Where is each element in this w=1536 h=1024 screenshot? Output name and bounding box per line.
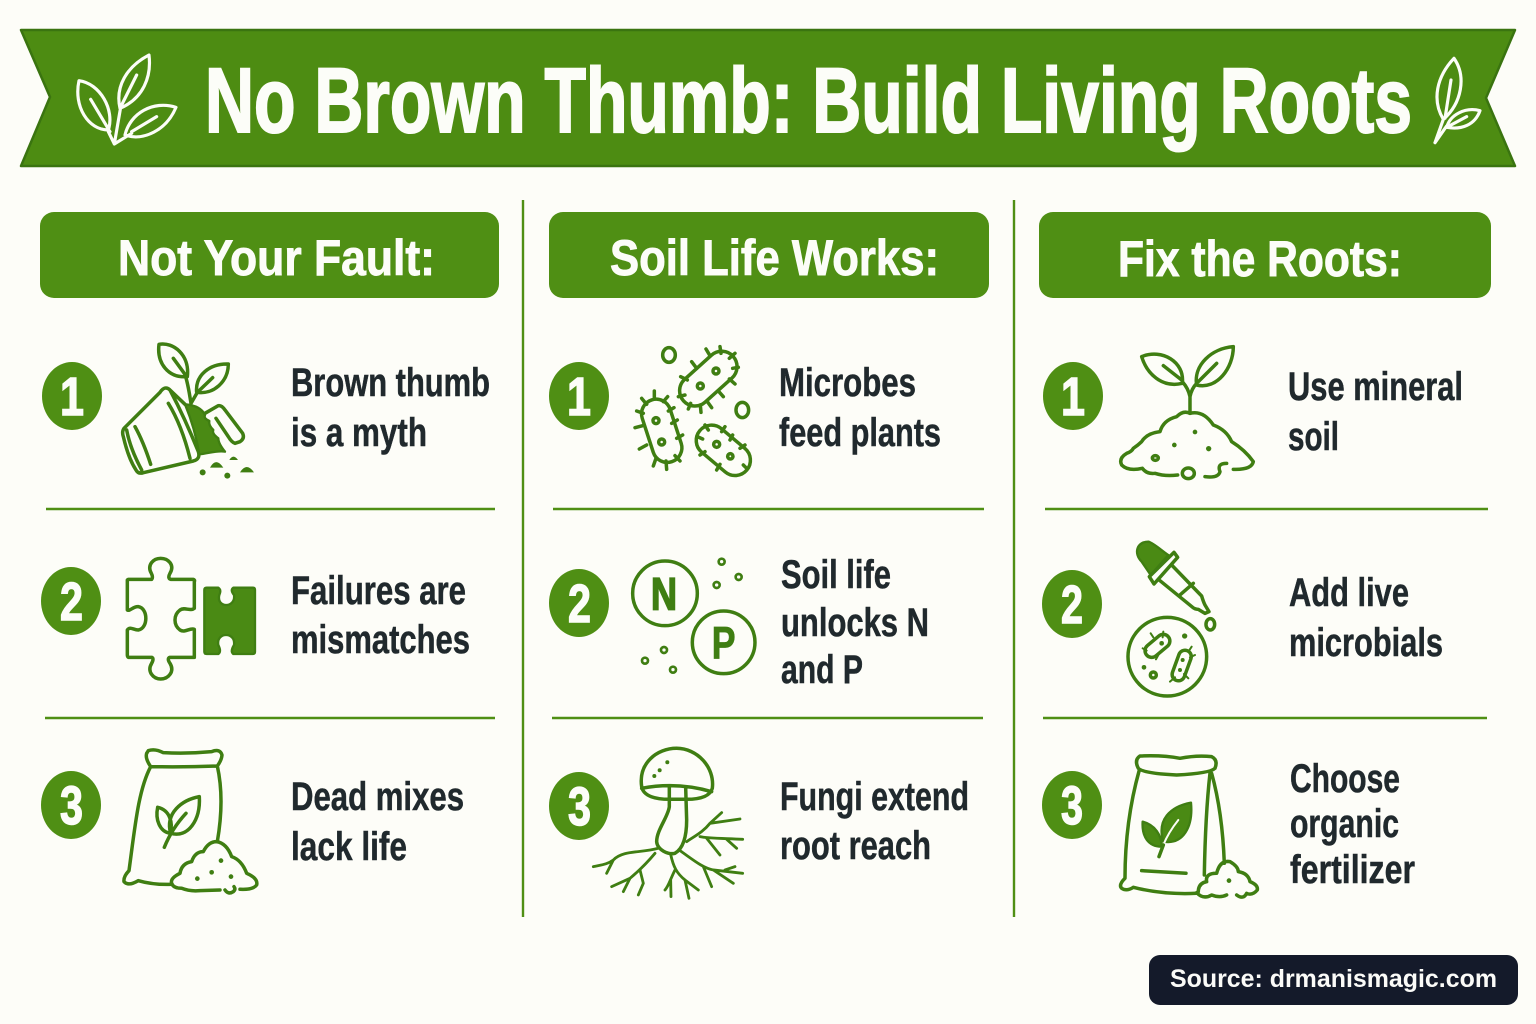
heading: fix the roots xyxy=(1039,212,1491,298)
number badge 1: 1 xyxy=(567,367,591,427)
number badge 1 xyxy=(42,362,102,430)
item: soil life unlocks n and p xyxy=(549,553,929,692)
text: and P xyxy=(781,648,863,692)
number badge 1: 1 xyxy=(1061,367,1085,427)
number badge 1: 1 xyxy=(60,367,84,427)
text xyxy=(780,775,969,868)
number badge 2: 2 xyxy=(60,572,83,632)
panel: fix the roots xyxy=(1039,212,1491,897)
text: mismatches xyxy=(291,618,470,662)
text: feed plants xyxy=(779,411,941,455)
text: Dead mixes xyxy=(291,775,464,819)
icon: three leaves xyxy=(78,55,176,144)
icon: nitrogen and phosphorus: P xyxy=(712,618,736,669)
source badge: Source: drmanismagic.com xyxy=(1170,965,1497,993)
column divider left xyxy=(522,200,524,917)
text: Failures are xyxy=(291,569,466,613)
text: Add live xyxy=(1289,571,1409,615)
column divider right xyxy=(1013,200,1015,917)
number badge 2 xyxy=(549,569,609,637)
text xyxy=(291,361,490,455)
item: choose organic fertilizer xyxy=(1042,756,1415,897)
text: lack life xyxy=(291,825,407,869)
text: Use mineral xyxy=(1288,365,1463,409)
text: fertilizer xyxy=(1290,848,1415,892)
text: root reach xyxy=(780,824,931,868)
item: dead mixes lack life xyxy=(41,750,464,893)
text xyxy=(779,361,941,455)
number badge 1 xyxy=(1043,362,1103,430)
source badge xyxy=(1149,955,1518,1005)
heading: fix the roots: Fix the Roots: xyxy=(1118,231,1402,287)
text xyxy=(291,569,470,662)
heading: soil life works xyxy=(549,212,989,298)
text: soil xyxy=(1288,415,1339,459)
number badge 3 xyxy=(41,771,101,839)
icon: sprig xyxy=(1435,58,1480,143)
number badge 3: 3 xyxy=(60,776,83,836)
text xyxy=(781,553,929,692)
heading: not your fault: Not Your Fault: xyxy=(118,230,435,286)
icon: tipped plant pot xyxy=(123,344,254,479)
icon: microbes xyxy=(635,345,757,482)
number badge 2 xyxy=(1042,570,1102,638)
text: microbials xyxy=(1289,621,1443,665)
text xyxy=(291,775,464,869)
item: use mineral soil xyxy=(1043,347,1463,479)
heading: not your fault xyxy=(40,212,499,298)
text: Brown thumb xyxy=(291,361,490,405)
number badge 2: 2 xyxy=(568,574,591,634)
text xyxy=(1290,757,1415,892)
icon: dropper and petri dish xyxy=(1128,542,1215,696)
panel: not your fault xyxy=(40,212,499,893)
item: microbes feed plants xyxy=(549,345,941,482)
number badge 3: 3 xyxy=(568,777,591,837)
title banner xyxy=(21,30,1515,166)
text: unlocks N xyxy=(781,601,929,645)
icon: fertilizer bag xyxy=(1121,756,1257,897)
text: is a myth xyxy=(291,411,427,455)
heading: soil life works: Soil Life Works: xyxy=(610,230,939,286)
text: Microbes xyxy=(779,361,916,405)
text: Choose xyxy=(1290,757,1400,801)
item: failures are mismatches xyxy=(41,558,470,679)
icon: sprout in soil xyxy=(1121,347,1253,479)
text: Fungi extend xyxy=(780,775,969,819)
item: brown thumb is a myth xyxy=(42,344,490,479)
icon: nitrogen and phosphorus: N xyxy=(651,568,677,619)
text: Soil life xyxy=(781,553,891,597)
icon: mushroom with roots xyxy=(593,748,743,898)
icon: potting mix bag xyxy=(124,750,257,893)
number badge 1 xyxy=(549,362,609,430)
text xyxy=(1289,571,1443,665)
number badge 3: 3 xyxy=(1061,776,1083,836)
number badge 3 xyxy=(549,772,609,840)
number badge 2: 2 xyxy=(1061,575,1083,635)
icon: nitrogen and phosphorus xyxy=(633,559,755,674)
number badge 2 xyxy=(41,567,101,635)
item: fungi extend root reach xyxy=(549,748,969,898)
text xyxy=(1288,365,1463,459)
icon: puzzle pieces xyxy=(127,558,255,679)
number badge 3 xyxy=(1042,771,1102,839)
item: add live microbials xyxy=(1042,542,1443,696)
text: organic xyxy=(1290,802,1399,846)
panel: soil life works xyxy=(549,212,989,898)
